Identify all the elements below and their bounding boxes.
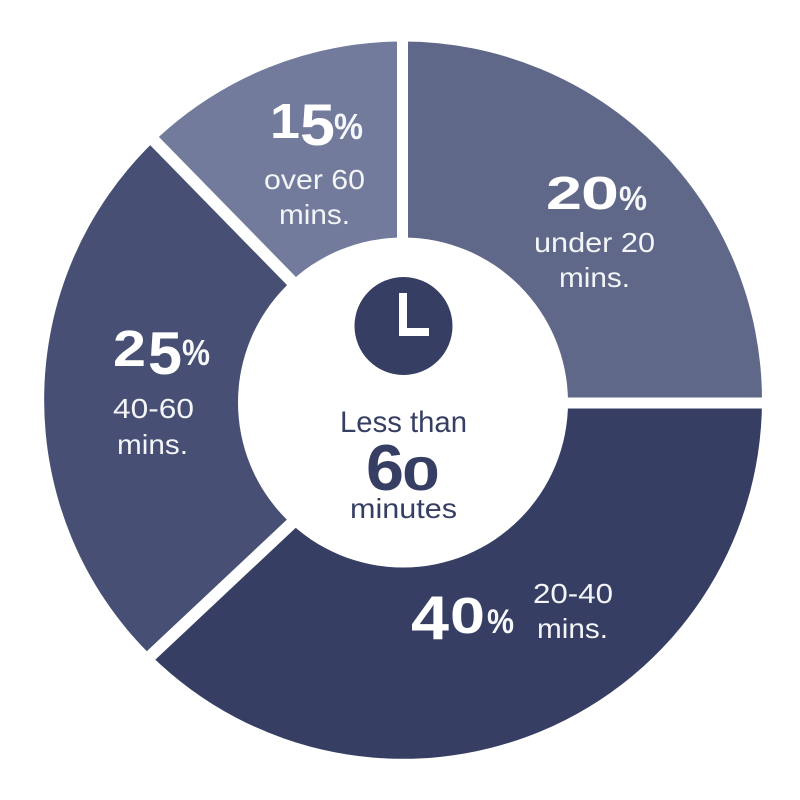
- center label: minutes: [350, 493, 457, 524]
- label: 15% over 60 mins: %: [334, 106, 363, 147]
- label: 40% 20-40 mins: [411, 578, 613, 653]
- center label: 0: [402, 447, 440, 500]
- icon: clock: [354, 277, 452, 375]
- label: 15% over 60 mins: [264, 93, 365, 230]
- label: 20% under 20 mins: under 20: [534, 227, 655, 258]
- label: 25% 40-60 mins: 5: [148, 320, 182, 387]
- label: 40% 20-40 mins: 0: [450, 587, 485, 644]
- label: 15% over 60 mins: mins.: [279, 199, 350, 230]
- center circle: [238, 238, 568, 568]
- center label: 6: [366, 431, 404, 504]
- center label: [340, 406, 467, 524]
- label: 15% over 60 mins: over 60: [264, 164, 365, 195]
- label: 40% 20-40 mins: mins.: [537, 613, 608, 644]
- label: 25% 40-60 mins: %: [182, 332, 210, 373]
- label: 20% under 20 mins: 2: [546, 167, 582, 219]
- label: 40% 20-40 mins: 20-40: [533, 578, 613, 609]
- segment: 20% under 20 mins: [403, 42, 762, 400]
- label: 25% 40-60 mins: 40-60: [113, 393, 194, 424]
- label: 15% over 60 mins: 5: [300, 93, 335, 158]
- label: 20% under 20 mins: 0: [581, 167, 619, 219]
- segment: 40% 20-40 mins: [151, 400, 762, 759]
- segment: 15% over 60 mins: [154, 41, 403, 331]
- label: 40% 20-40 mins: 4: [411, 584, 450, 653]
- label: 20% under 20 mins: %: [619, 180, 647, 218]
- label: 25% 40-60 mins: [113, 320, 210, 460]
- label: 15% over 60 mins: 1: [270, 95, 300, 149]
- label: 40% 20-40 mins: %: [487, 603, 514, 641]
- center label: Less than: [340, 406, 467, 439]
- segment: 25% 40-60 mins: [44, 141, 340, 656]
- label: 20% under 20 mins: [534, 167, 655, 293]
- label: 20% under 20 mins: mins.: [559, 262, 630, 293]
- label: 25% 40-60 mins: 2: [113, 320, 146, 377]
- label: 25% 40-60 mins: mins.: [117, 429, 188, 460]
